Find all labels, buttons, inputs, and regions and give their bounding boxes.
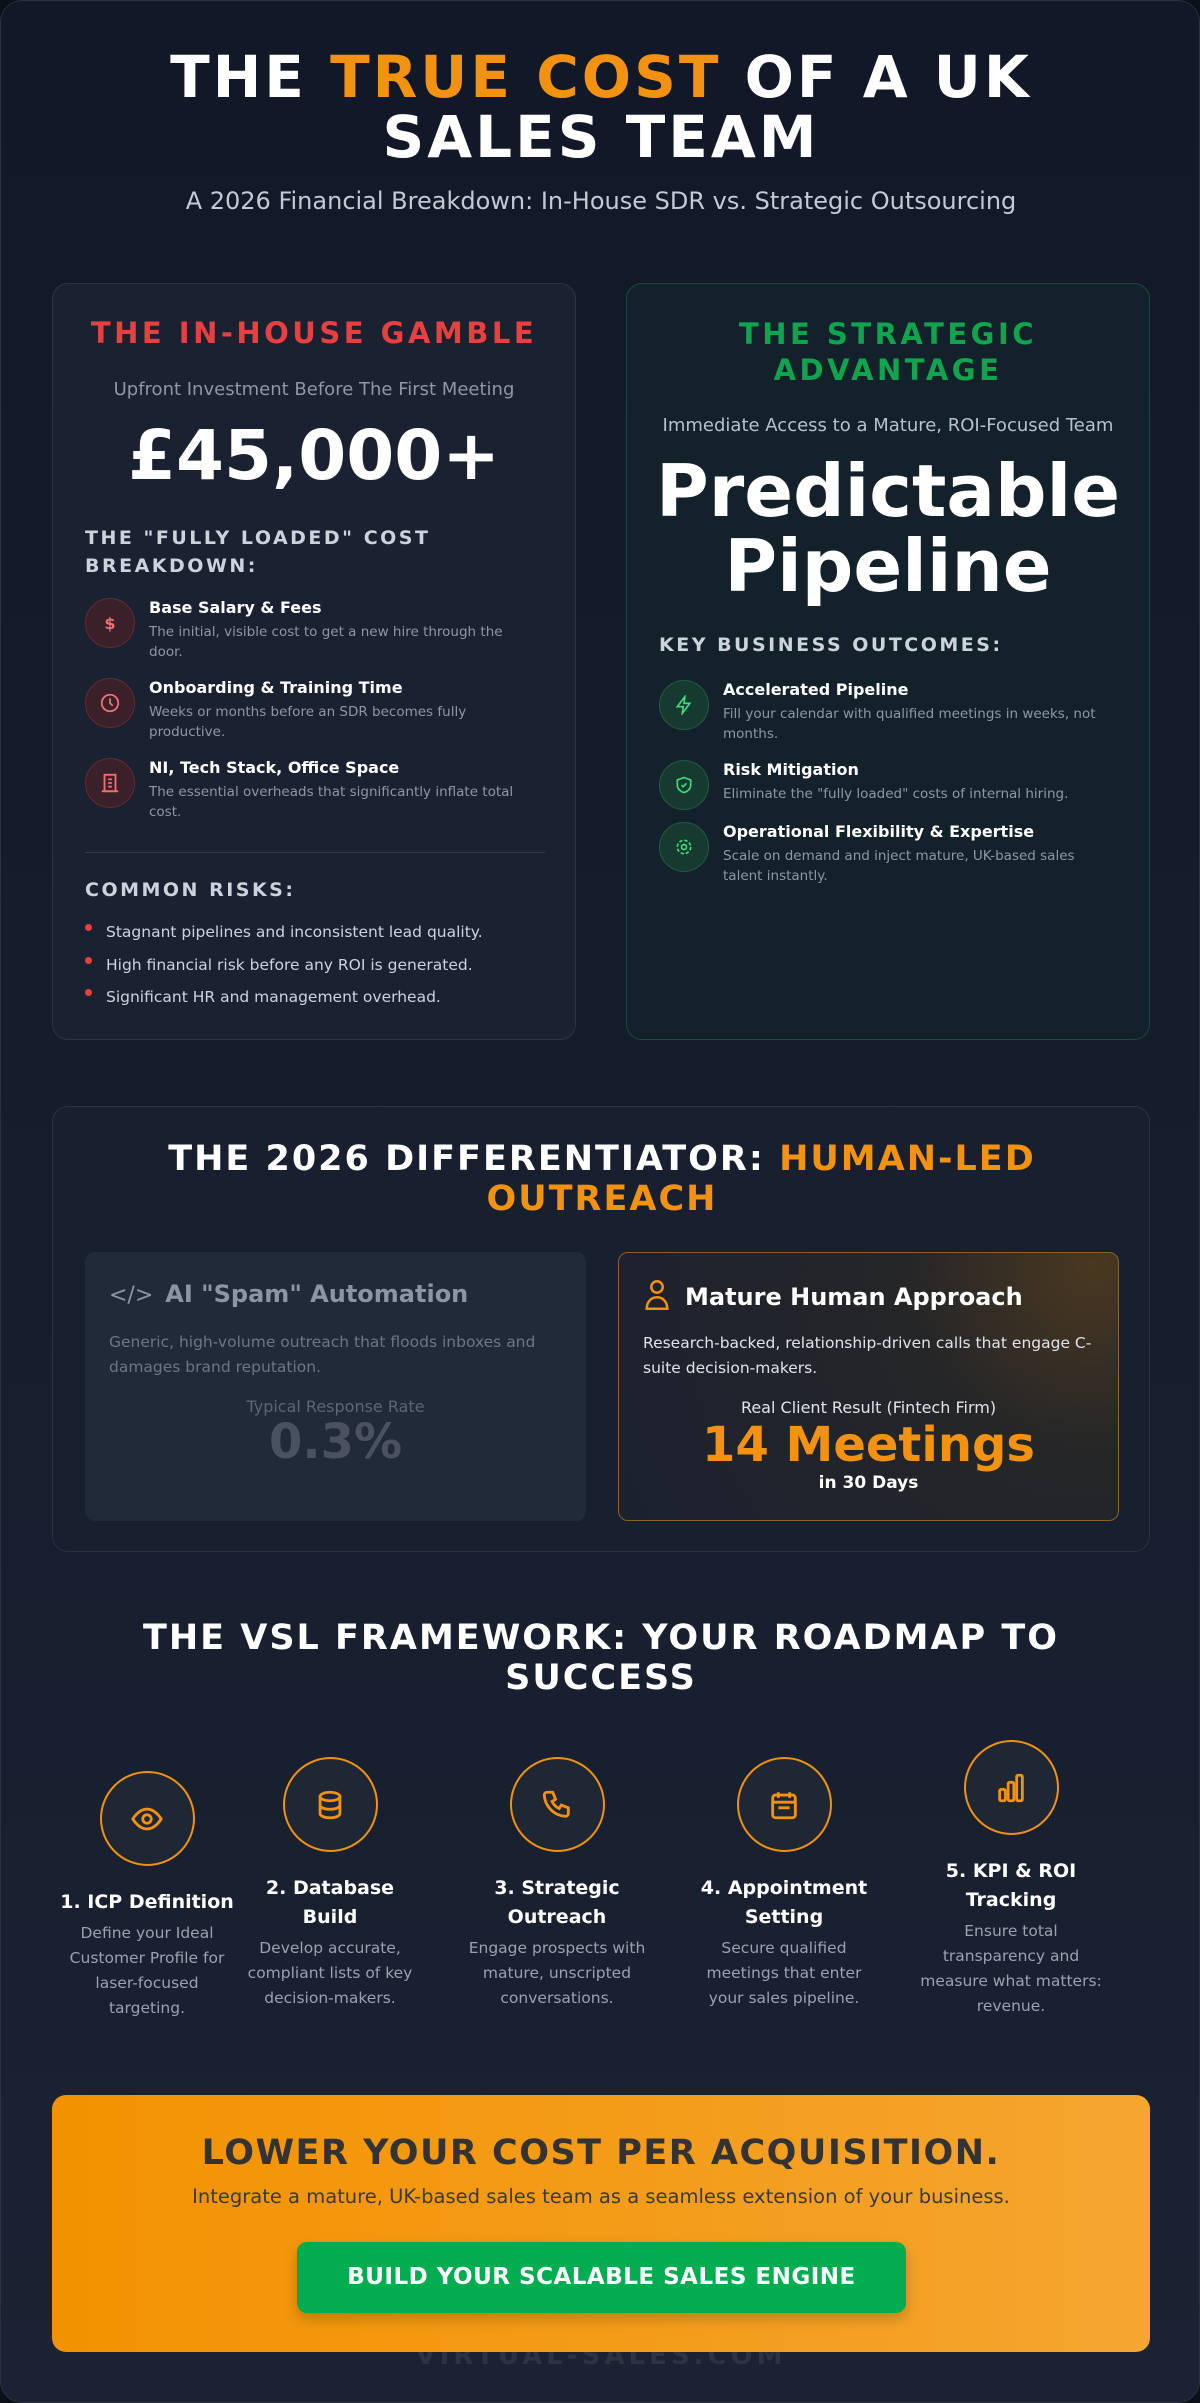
CTA panel — [52, 2095, 1150, 2352]
footer watermark: VIRTUAL-SALES.COM — [415, 2341, 786, 2371]
stat — [246, 1397, 425, 1470]
subheading: Upfront Investment Before The First Meeting — [114, 379, 514, 400]
item: accelerated — [659, 680, 1096, 742]
stat — [702, 1398, 1035, 1493]
risks label: COMMON RISKS: — [85, 879, 295, 901]
subheading: Immediate Access to a Mature, ROI-Focused Team — [663, 415, 1113, 436]
cost items — [85, 598, 513, 820]
CTA button — [297, 2242, 906, 2313]
heading: THE STRATEGIC — [739, 317, 1037, 351]
framework title: THE VSL FRAMEWORK: YOUR ROADMAP TO SUCCESS — [143, 1618, 1059, 1698]
CTA button: BUILD YOUR SCALABLE SALES ENGINE — [347, 2264, 856, 2290]
item: flexibility — [659, 822, 1075, 884]
step 2: Build — [303, 1906, 357, 1928]
item: salary: $ — [104, 614, 116, 632]
step 2: Develop accurate, compliant lists of key decision-makers. — [248, 1939, 412, 2007]
section label: THE "FULLY LOADED" COST BREAKDOWN: — [85, 527, 430, 577]
description: Generic, high-volume outreach that floods inboxes and damages brand reputation. — [109, 1333, 535, 1376]
big text: Predictable — [656, 449, 1120, 533]
big number: £45,000+ — [128, 416, 500, 496]
step 1 — [60, 1771, 234, 2017]
step 5 — [920, 1740, 1102, 2015]
step 3: 3. Strategic — [494, 1877, 620, 1899]
step 4 — [701, 1757, 867, 2007]
step 2 — [248, 1757, 412, 2007]
stat: 14 Meetings — [702, 1417, 1035, 1473]
item: risk: Risk Mitigation — [723, 760, 859, 779]
heading: THE 2026 DIFFERENTIATOR: HUMAN-LED OUTREACH — [168, 1139, 1036, 1219]
item: salary — [85, 598, 503, 660]
card: AI spam — [85, 1252, 586, 1521]
heading: ADVANTAGE — [774, 353, 1002, 387]
item: risk — [659, 760, 1068, 810]
stat: Real Client Result (Fintech Firm) — [741, 1398, 996, 1417]
step 2: 2. Database — [266, 1877, 394, 1899]
step 1: 1. ICP Definition — [60, 1891, 234, 1913]
risks list: High financial risk before any ROI is generated. — [106, 956, 473, 974]
item: onboarding: Onboarding & Training Time — [149, 678, 403, 697]
risks list — [85, 923, 483, 1006]
panel: strategic advantage — [626, 283, 1150, 1040]
step 4: Secure qualified meetings that enter your sales pipeline. — [706, 1939, 861, 2007]
panel: differentiator — [52, 1106, 1150, 1552]
item: onboarding — [85, 678, 466, 740]
step 4: 4. Appointment — [701, 1877, 867, 1899]
risks list: Significant HR and management overhead. — [106, 988, 441, 1006]
icon + title: </> AI "Spam" Automation — [109, 1280, 468, 1308]
item: flexibility: Operational Flexibility & Expertise — [723, 822, 1034, 841]
card: mature human — [618, 1252, 1119, 1521]
step 5: Ensure total transparency and measure what matters: revenue. — [920, 1922, 1102, 2015]
step 5: 5. KPI & ROI — [946, 1860, 1076, 1882]
step 1: Define your Ideal Customer Profile for laser-focused targeting. — [70, 1924, 224, 2017]
stat: Typical Response Rate — [246, 1397, 425, 1416]
step 5: Tracking — [966, 1889, 1056, 1911]
CTA subtext: Integrate a mature, UK-based sales team as a seamless extension of your business. — [192, 2185, 1010, 2208]
icon + title: Mature Human Approach — [685, 1283, 1023, 1311]
item: onboarding: Weeks or months before an SDR becomes fully productive. — [149, 704, 466, 740]
title: THE TRUE COST OF A UK — [170, 43, 1032, 111]
framework steps — [60, 1740, 1102, 2017]
panel: in-house gamble — [52, 283, 576, 1040]
step 3: Engage prospects with mature, unscripted conversations. — [469, 1939, 645, 2007]
title: SALES TEAM — [382, 103, 820, 171]
big text: Pipeline — [724, 524, 1052, 608]
subtitle: A 2026 Financial Breakdown: In-House SDR vs. Strategic Outsourcing — [186, 187, 1016, 215]
stat: 0.3% — [269, 1414, 402, 1470]
item: salary: The initial, visible cost to get a new hire through the door. — [149, 624, 503, 660]
item: overheads — [85, 758, 513, 820]
heading — [739, 317, 1037, 387]
step 3: Outreach — [508, 1906, 606, 1928]
item: flexibility: Scale on demand and inject mature, UK-based sales talent instantly. — [723, 848, 1075, 884]
item: accelerated: Accelerated Pipeline — [723, 680, 908, 699]
item: salary: Base Salary & Fees — [149, 598, 321, 617]
step 3 — [469, 1757, 645, 2007]
item: overheads: NI, Tech Stack, Office Space — [149, 758, 399, 777]
item: risk: Eliminate the "fully loaded" costs of internal hiring. — [723, 786, 1068, 802]
CTA heading: LOWER YOUR COST PER ACQUISITION. — [202, 2133, 1000, 2173]
stat: in 30 Days — [819, 1473, 918, 1493]
item: accelerated: Fill your calendar with qualified meetings in weeks, not months. — [723, 706, 1096, 742]
step 4: Setting — [745, 1906, 823, 1928]
risks list: Stagnant pipelines and inconsistent lead quality. — [106, 923, 483, 941]
title — [170, 43, 1032, 171]
section label: KEY BUSINESS OUTCOMES: — [659, 634, 1003, 656]
heading: THE IN-HOUSE GAMBLE — [91, 316, 537, 350]
outcome items — [659, 680, 1096, 884]
description: Research-backed, relationship-driven calls that engage C-suite decision-makers. — [643, 1334, 1091, 1377]
big text — [656, 449, 1120, 608]
item: overheads: The essential overheads that significantly inflate total cost. — [149, 784, 513, 820]
